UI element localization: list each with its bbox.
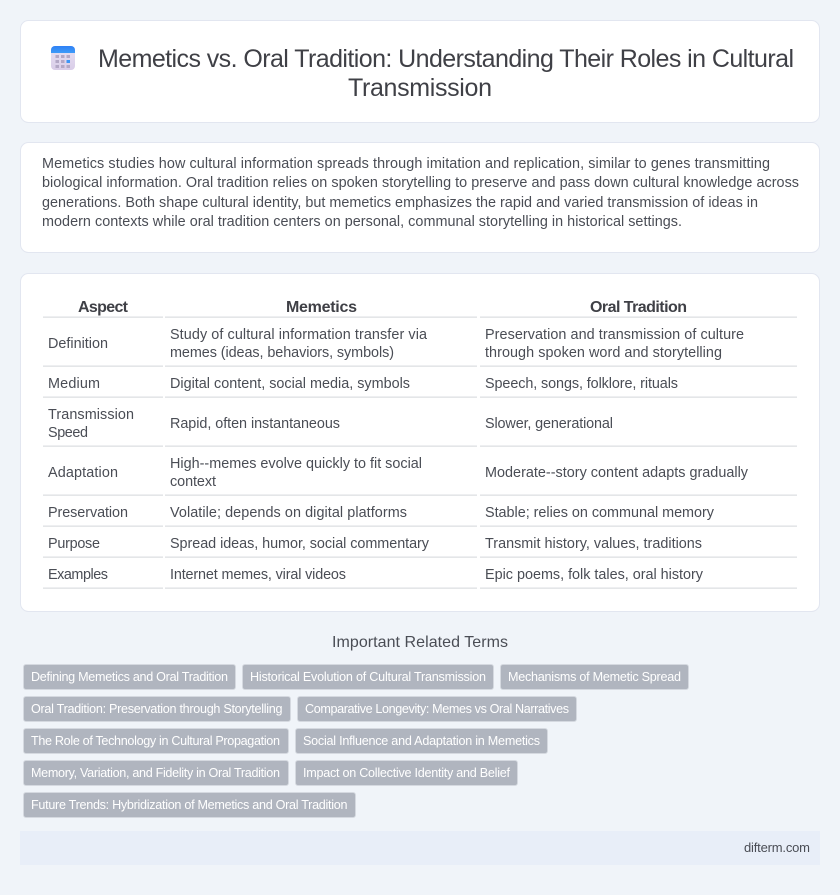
footer: [20, 831, 820, 865]
row: transmission speed: Rapid, often instantaneous: [170, 416, 340, 432]
intro paragraph: biological information. Oral tradition relies on spoken storytelling to preserve and pass down cultural knowledge across: [42, 175, 799, 191]
tag: role of technology: [24, 728, 288, 754]
row: definition: Preservation and transmission of culture: [485, 327, 744, 343]
intro paragraph: modern contexts while oral tradition centers on personal, communal storytelling in historical settings.: [42, 214, 682, 230]
table header: Memetics: [286, 299, 357, 316]
row: adaptation: Moderate--story content adapts gradually: [485, 465, 749, 481]
heading: related terms: Important Related Terms: [332, 634, 508, 651]
table header: [43, 299, 797, 318]
tag: defining: [24, 664, 236, 690]
row: transmission speed: [43, 407, 797, 447]
row: preservation: Stable; relies on communal memory: [485, 505, 715, 521]
related term tags: [24, 664, 688, 818]
footer brand: difterm.com: [744, 840, 810, 855]
row: definition: [43, 327, 797, 367]
tag: memory variation: Memory, Variation, and Fidelity in Oral Tradition: [31, 766, 280, 780]
tag: mechanisms: Mechanisms of Memetic Spread: [508, 670, 681, 684]
tag: historical evolution: Historical Evolution of Cultural Transmission: [250, 670, 486, 684]
row: medium: Speech, songs, folklore, rituals: [485, 376, 678, 392]
row: purpose: Purpose: [48, 536, 100, 552]
row: purpose: Transmit history, values, traditions: [485, 536, 702, 552]
row: purpose: [43, 536, 797, 558]
row: purpose: Spread ideas, humor, social commentary: [170, 536, 430, 552]
tag: social influence: Social Influence and Adaptation in Memetics: [303, 734, 540, 748]
tag: comparative longevity: [298, 696, 576, 722]
panel: introduction: [20, 142, 820, 252]
row: examples: Internet memes, viral videos: [170, 567, 346, 583]
tag: collective identity: Impact on Collective Identity and Belief: [303, 766, 510, 780]
row: preservation: Volatile; depends on digital platforms: [170, 505, 407, 521]
table header: Aspect: [78, 299, 129, 316]
row: definition: Study of cultural information transfer via: [170, 327, 427, 343]
row: examples: Examples: [48, 567, 108, 583]
tag: future trends: Future Trends: Hybridization of Memetics and Oral Tradition: [31, 798, 348, 812]
title: Transmission: [348, 74, 492, 102]
row: examples: Epic poems, folk tales, oral history: [485, 567, 704, 583]
tag: role of technology: The Role of Technology in Cultural Propagation: [31, 734, 280, 748]
tag: comparative longevity: Comparative Longevity: Memes vs Oral Narratives: [305, 702, 569, 716]
row: preservation: Preservation: [48, 505, 128, 521]
row: transmission speed: Slower, generational: [485, 416, 613, 432]
row: adaptation: Adaptation: [48, 465, 118, 481]
tag: memory variation: [24, 760, 288, 786]
tag: future trends: [24, 792, 356, 818]
tag: oral tradition preservation: Oral Tradition: Preservation through Storytelling: [31, 702, 282, 716]
title: [98, 45, 794, 102]
row: definition: through spoken word and storytelling: [485, 345, 722, 361]
row: definition: memes (ideas, behaviors, symbols): [170, 345, 394, 361]
tag: oral tradition preservation: [24, 696, 290, 722]
icon: calendar: [51, 46, 75, 70]
tag: collective identity: [296, 760, 518, 786]
intro paragraph: generations. Both shape cultural identity, but memetics emphasizes the rapid and varied transmission of ideas in: [42, 195, 758, 211]
row: definition: Definition: [48, 336, 108, 352]
row: adaptation: [43, 456, 797, 496]
row: preservation: [43, 505, 797, 527]
tag: defining: Defining Memetics and Oral Tradition: [31, 670, 228, 684]
row: medium: Medium: [48, 376, 100, 392]
intro paragraph: [42, 156, 799, 230]
row: examples: [43, 567, 797, 589]
row: adaptation: context: [170, 474, 216, 490]
tag: historical evolution: [242, 664, 494, 690]
intro paragraph: Memetics studies how cultural information spreads through imitation and replication, similar to genes transmitting: [42, 156, 770, 172]
row: medium: Digital content, social media, symbols: [170, 376, 410, 392]
title: Memetics vs. Oral Tradition: Understanding Their Roles in Cultural: [98, 45, 794, 73]
row: adaptation: High--memes evolve quickly to fit social: [170, 456, 422, 472]
row: transmission speed: Speed: [48, 425, 88, 441]
tag: social influence: [296, 728, 548, 754]
tag: mechanisms: [500, 664, 688, 690]
panel: comparison table: [20, 274, 820, 612]
row: transmission speed: Transmission: [48, 407, 134, 423]
row: medium: [43, 376, 797, 398]
panel: title header: [20, 20, 820, 122]
table header: Oral Tradition: [590, 299, 687, 316]
